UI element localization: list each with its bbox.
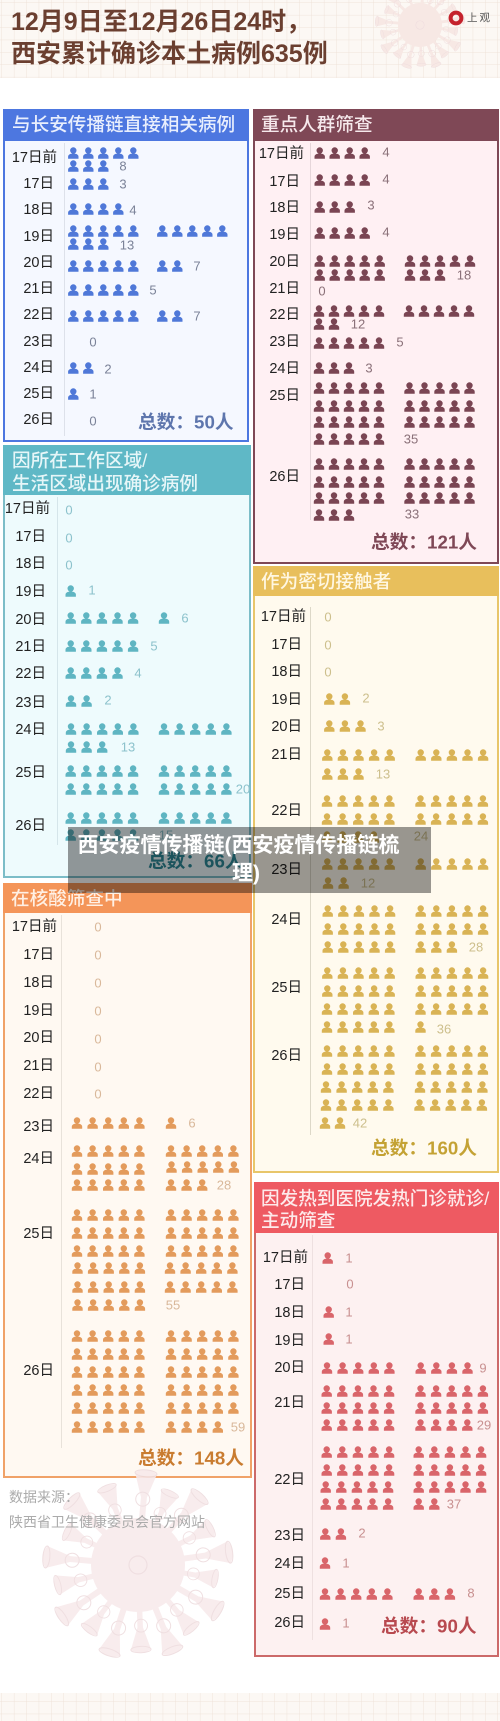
day labels: 20日 (23, 255, 54, 271)
day labels: 19日 (271, 692, 302, 708)
day labels: 26日 (274, 1615, 305, 1631)
logo: 上观: 上观 (467, 12, 492, 24)
value numbers: 6 (188, 1116, 196, 1130)
total: 总数：160人 (371, 1138, 477, 1158)
day labels: 22日 (274, 1472, 305, 1488)
value numbers: 2 (104, 362, 112, 376)
panel: 因发热到医院发热门诊就诊/主动筛查 (254, 1182, 499, 1656)
day labels: 22日 (15, 666, 46, 682)
value numbers: 4 (134, 666, 142, 680)
value numbers: 1 (89, 386, 97, 402)
value numbers: 5 (396, 334, 404, 350)
day labels: 21日 (23, 1058, 54, 1074)
value numbers: 0 (65, 558, 73, 572)
icon: virus watermark (42, 1469, 234, 1659)
day labels: 17日前 (12, 149, 57, 166)
value numbers: 2 (362, 690, 370, 706)
value numbers: 55 (166, 1298, 180, 1312)
day labels: 17日前 (5, 500, 50, 517)
day labels: 17日前 (263, 1249, 308, 1266)
title: 12月9日至12月26日24时， (11, 8, 311, 36)
value numbers (324, 610, 483, 1130)
value numbers: 0 (94, 1060, 102, 1074)
day labels: 17日 (15, 529, 46, 545)
day labels: 19日 (23, 229, 54, 245)
panel heading: 因发热到医院发热门诊就诊/ (261, 1188, 490, 1209)
person pictogram chart (68, 147, 228, 400)
value numbers: 12 (351, 316, 365, 332)
value numbers: 1 (342, 1556, 350, 1570)
day labels (12, 918, 57, 1379)
value numbers: 0 (94, 1004, 102, 1018)
day labels: 26日 (15, 818, 46, 834)
value numbers: 12 (361, 876, 375, 890)
value numbers: 36 (437, 1022, 451, 1036)
day labels: 19日 (274, 1333, 305, 1349)
value numbers: 0 (324, 664, 332, 680)
day labels: 24日 (271, 912, 302, 928)
day labels: 17日 (271, 637, 302, 653)
value numbers: 37 (447, 1496, 461, 1512)
day labels (12, 149, 57, 428)
value numbers: 59 (231, 1420, 245, 1434)
panel heading (3, 445, 251, 495)
value numbers: 13 (120, 238, 134, 252)
value numbers: 28 (217, 1178, 231, 1192)
panel: 作为密切接触者 (253, 566, 499, 1172)
panel heading: 在核酸筛查中 (11, 888, 123, 909)
value numbers: 0 (94, 948, 102, 962)
value numbers (318, 144, 471, 522)
day labels: 24日 (274, 1556, 305, 1572)
day labels: 18日 (271, 664, 302, 680)
panel heading: 与长安传播链直接相关病例 (12, 114, 235, 135)
value numbers: 0 (65, 502, 73, 518)
day labels: 17日前 (261, 608, 306, 625)
day labels: 21日 (274, 1395, 305, 1411)
day labels (261, 608, 306, 1064)
overlay caption: 理) (232, 862, 260, 885)
day labels: 18日 (23, 202, 54, 218)
data source note: 数据来源： (9, 1489, 79, 1505)
day labels: 19日 (269, 227, 300, 243)
panel: 与长安传播链直接相关病例 (3, 109, 249, 441)
day labels: 17日 (23, 947, 54, 963)
day labels: 17日 (269, 174, 300, 190)
total: 总数：50人 (138, 412, 234, 432)
value numbers (342, 1250, 491, 1630)
panel heading (253, 566, 499, 596)
day labels: 23日 (274, 1528, 305, 1544)
day labels: 21日 (15, 639, 46, 655)
page header band (0, 0, 500, 78)
value numbers: 7 (193, 308, 201, 324)
value numbers: 7 (193, 258, 201, 274)
value numbers: 28 (469, 940, 483, 954)
value numbers: 3 (119, 176, 127, 192)
logo: 上观 (451, 12, 492, 24)
panel heading: 作为密切接触者 (261, 571, 391, 592)
panel heading: 重点人群筛查 (261, 114, 373, 135)
day labels: 21日 (269, 281, 300, 297)
panel: 重点人群筛查 (253, 109, 499, 563)
value numbers: 1 (345, 1304, 353, 1320)
title (11, 8, 328, 68)
day labels: 18日 (23, 975, 54, 991)
day labels: 19日 (15, 584, 46, 600)
value numbers: 8 (467, 1586, 475, 1600)
value numbers: 20 (236, 782, 250, 796)
panel: 因所在工作区域/生活区域出现确诊病例 (3, 445, 251, 877)
day labels (5, 500, 50, 834)
day labels: 17日 (274, 1277, 305, 1293)
value numbers: 0 (318, 284, 326, 298)
day labels: 18日 (269, 200, 300, 216)
total: 总数：90人 (381, 1616, 477, 1636)
day labels: 23日 (15, 695, 46, 711)
value numbers: 35 (404, 432, 418, 446)
day labels: 20日 (15, 612, 46, 628)
overlay caption (68, 827, 431, 893)
value numbers: 24 (414, 828, 428, 844)
panel heading (254, 1182, 499, 1233)
value numbers: 2 (358, 1526, 366, 1540)
day labels (263, 1249, 308, 1631)
day labels: 22日 (271, 803, 302, 819)
value numbers: 6 (181, 610, 189, 626)
day labels: 25日 (274, 1586, 305, 1602)
value numbers: 1 (342, 1616, 350, 1630)
value numbers: 13 (121, 740, 135, 754)
value numbers (89, 158, 201, 428)
day labels: 25日 (271, 980, 302, 996)
panel heading (3, 109, 249, 141)
data source note: 陕西省卫生健康委员会官方网站 (9, 1514, 205, 1530)
day labels: 18日 (274, 1305, 305, 1321)
day labels: 26日 (23, 412, 54, 428)
day labels: 20日 (271, 719, 302, 735)
value numbers: 9 (479, 1360, 487, 1376)
value numbers: 0 (324, 638, 332, 652)
day labels: 18日 (15, 556, 46, 572)
person pictogram chart (314, 147, 475, 521)
person pictogram chart (66, 585, 232, 841)
day labels: 17日 (23, 176, 54, 192)
value numbers: 8 (119, 158, 127, 174)
overlay caption: 西安疫情传播链(西安疫情传播链梳 (78, 834, 400, 857)
day labels: 22日 (269, 307, 300, 323)
data source note (9, 1489, 205, 1530)
value numbers: 1 (345, 1332, 353, 1346)
value numbers: 4 (382, 224, 390, 240)
value numbers: 2 (104, 692, 112, 708)
day labels: 22日 (23, 1086, 54, 1102)
value numbers: 0 (346, 1276, 354, 1292)
day labels: 24日 (23, 360, 54, 376)
value numbers: 5 (149, 282, 157, 298)
day labels: 19日 (23, 1003, 54, 1019)
value numbers: 0 (89, 334, 97, 350)
value numbers: 4 (129, 202, 137, 218)
value numbers: 3 (365, 360, 373, 376)
icon: virus watermark in header (375, 0, 465, 69)
value numbers: 0 (65, 530, 73, 546)
day labels: 24日 (15, 722, 46, 738)
value numbers: 0 (324, 610, 332, 624)
day labels: 25日 (15, 765, 46, 781)
value numbers: 0 (94, 1086, 102, 1102)
panel heading: 主动筛查 (261, 1210, 335, 1231)
total: 总数：66人 (148, 850, 244, 872)
value numbers: 42 (353, 1116, 367, 1130)
value numbers: 4 (382, 144, 390, 160)
value numbers: 0 (94, 976, 102, 990)
day labels (259, 145, 304, 485)
person pictogram chart (72, 1117, 239, 1433)
day labels: 26日 (23, 1363, 54, 1379)
panel heading: 因所在工作区域/ (12, 450, 148, 471)
day labels: 26日 (271, 1048, 302, 1064)
day labels: 17日前 (12, 918, 57, 935)
person pictogram chart (320, 1252, 488, 1630)
person pictogram chart (320, 693, 488, 1129)
value numbers: 5 (150, 638, 158, 654)
value numbers: 0 (94, 1032, 102, 1046)
panel: 在核酸筛查中 (3, 883, 252, 1477)
value numbers: 13 (376, 766, 390, 782)
day labels: 21日 (23, 281, 54, 297)
footer grid band (0, 1693, 500, 1721)
panel heading: 生活区域出现确诊病例 (12, 473, 198, 494)
day labels: 20日 (269, 254, 300, 270)
value numbers (94, 920, 245, 1434)
value numbers: 1 (88, 582, 96, 598)
day labels: 25日 (23, 386, 54, 402)
day labels: 23日 (23, 1119, 54, 1135)
value numbers: 33 (405, 506, 419, 522)
value numbers (65, 502, 250, 842)
day labels: 21日 (271, 747, 302, 763)
day labels: 24日 (23, 1151, 54, 1167)
day labels: 23日 (271, 862, 302, 878)
day labels: 25日 (269, 388, 300, 404)
day labels: 20日 (23, 1030, 54, 1046)
value numbers: 0 (89, 414, 97, 428)
value numbers: 29 (477, 1418, 491, 1432)
panel heading (3, 883, 252, 913)
day labels: 23日 (23, 334, 54, 350)
day labels: 25日 (23, 1226, 54, 1242)
value numbers: 18 (457, 268, 471, 282)
day labels: 26日 (269, 469, 300, 485)
total: 总数：121人 (371, 532, 477, 552)
day labels: 17日前 (259, 145, 304, 162)
total: 总数：148人 (138, 1448, 244, 1468)
day labels: 24日 (269, 361, 300, 377)
value numbers: 3 (377, 718, 385, 734)
value numbers: 15 (159, 828, 173, 842)
value numbers: 0 (94, 920, 102, 934)
day labels: 23日 (269, 334, 300, 350)
day labels: 20日 (274, 1360, 305, 1376)
day labels: 22日 (23, 307, 54, 323)
value numbers: 1 (345, 1250, 353, 1266)
value numbers: 3 (367, 198, 375, 212)
title: 西安累计确诊本土病例635例 (11, 40, 328, 68)
value numbers: 4 (382, 172, 390, 186)
panel heading (253, 109, 499, 141)
